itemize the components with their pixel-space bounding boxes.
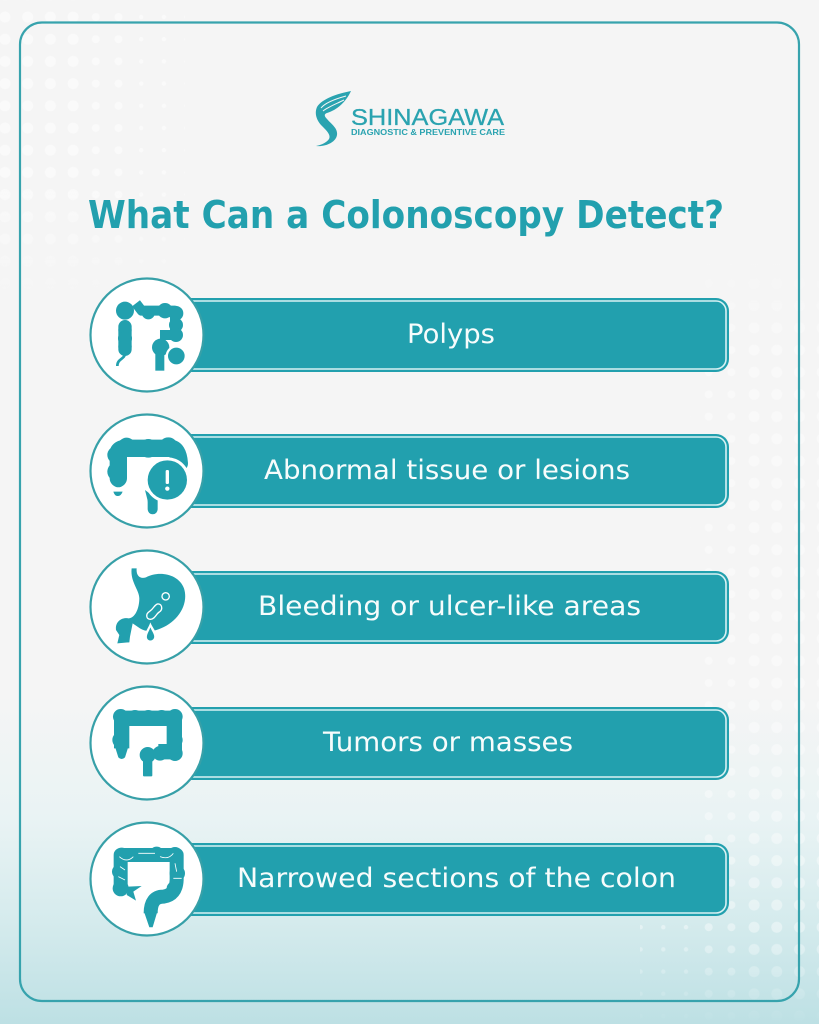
icon: colon with alert: [107, 437, 190, 509]
circle: [90, 414, 204, 528]
circle: [90, 686, 204, 800]
bar: [170, 571, 729, 644]
title: What Can a Colonoscopy Detect?: [88, 193, 724, 237]
label: Tumors or masses: [322, 727, 573, 758]
label: Bleeding or ulcer-like areas: [258, 591, 641, 622]
circle: [90, 278, 204, 392]
logo tagline: DIAGNOSTIC & PREVENTIVE CARE: [351, 127, 505, 137]
item: Polyps: [90, 278, 729, 392]
bar: [170, 707, 729, 780]
circle: [90, 550, 204, 664]
item: Abnormal tissue or lesions: [90, 414, 729, 528]
background: [0, 779, 819, 1024]
icon: stomach with ulcer: [116, 568, 185, 643]
circle: [90, 822, 204, 936]
logo name: SHINAGAWA: [351, 104, 504, 130]
icon: colon: [112, 709, 183, 776]
icon: detailed colon: [112, 847, 185, 927]
bar: [170, 298, 729, 372]
label: Narrowed sections of the colon: [237, 863, 676, 894]
label: Abnormal tissue or lesions: [264, 455, 630, 486]
icon: winged logo mark: [316, 91, 351, 146]
label: Polyps: [407, 319, 495, 350]
logo: [316, 91, 505, 146]
bar: [170, 843, 729, 916]
icon: colon with polyp: [116, 302, 186, 371]
item: Narrowed sections of the colon: [90, 822, 729, 936]
item: Bleeding or ulcer-like areas: [90, 550, 729, 664]
bar: [170, 434, 729, 508]
item: Tumors or masses: [90, 686, 729, 800]
